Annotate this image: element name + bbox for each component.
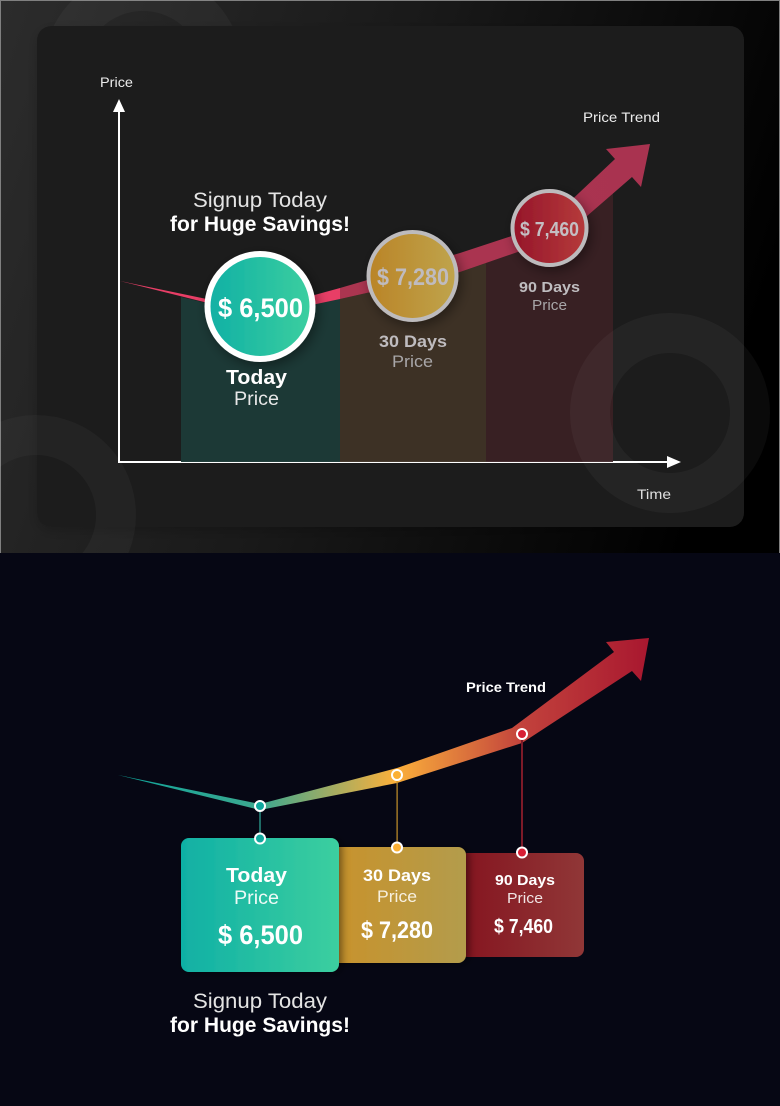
badge: 30 days price (368, 232, 456, 320)
card: 90 days (460, 853, 584, 957)
headline: for Huge Savings! (170, 213, 350, 236)
card: 90 days: Price (507, 890, 543, 907)
card: 30 days (330, 847, 466, 963)
axis label: price: Price (100, 74, 133, 90)
card: 30 days: Price (377, 887, 417, 906)
label: 30 days price: Price (392, 352, 433, 371)
connector: today (259, 806, 261, 838)
card: today: Today (226, 865, 288, 887)
time axis (118, 456, 681, 468)
top chart (100, 74, 681, 502)
bottom chart (118, 638, 649, 1037)
connector: 30 days (396, 775, 398, 847)
card: today: Price (234, 888, 279, 909)
label: today price: Price (234, 389, 279, 410)
card: 90 days: 90 Days (495, 872, 555, 889)
trend arrow (118, 638, 649, 810)
headline: for Huge Savings! (170, 1014, 350, 1037)
label: price trend: Price Trend (583, 109, 660, 125)
headline (170, 189, 350, 236)
price axis (113, 99, 125, 463)
decorative ring: top left (63, 0, 223, 151)
card: 30 days: 30 Days (363, 866, 431, 885)
card: today: $ 6,500 (218, 920, 303, 950)
axis label: time: Time (637, 486, 671, 502)
bar: today (181, 297, 340, 462)
connector: 90 days (521, 734, 523, 852)
badge: 30 days price: $ 7,280 (377, 264, 449, 291)
card: today (181, 838, 339, 972)
card: 30 days: $ 7,280 (361, 917, 433, 944)
headline: Signup Today (193, 990, 328, 1013)
chart panel (37, 26, 744, 527)
markers: 30 days (392, 770, 402, 852)
headline (170, 990, 350, 1037)
label: price trend: Price Trend (466, 680, 546, 695)
decorative ring: bottom left (0, 435, 116, 595)
label: 90 days price: 90 Days (519, 279, 580, 296)
markers: 90 days (517, 729, 527, 858)
decorative ring: right (590, 333, 750, 493)
bar: 90 days (486, 193, 613, 462)
bar: 30 days (340, 263, 486, 462)
badge: 90 days price: $ 7,460 (520, 219, 579, 241)
badge: 90 days price (512, 191, 586, 265)
markers: today (255, 801, 265, 844)
badge: today price: $ 6,500 (218, 293, 303, 323)
card: 90 days: $ 7,460 (494, 916, 553, 938)
label: today price: Today (226, 367, 288, 389)
label: 30 days price: 30 Days (379, 332, 447, 351)
bottom section background (0, 553, 780, 1106)
headline: Signup Today (193, 189, 328, 212)
label: 30 days price (379, 332, 447, 371)
label: 90 days price: Price (532, 297, 567, 314)
label: today price (226, 367, 288, 410)
badge: today price (208, 254, 312, 359)
price trend arrow (120, 144, 650, 316)
label: 90 days price (519, 279, 580, 314)
top section background (0, 0, 780, 554)
